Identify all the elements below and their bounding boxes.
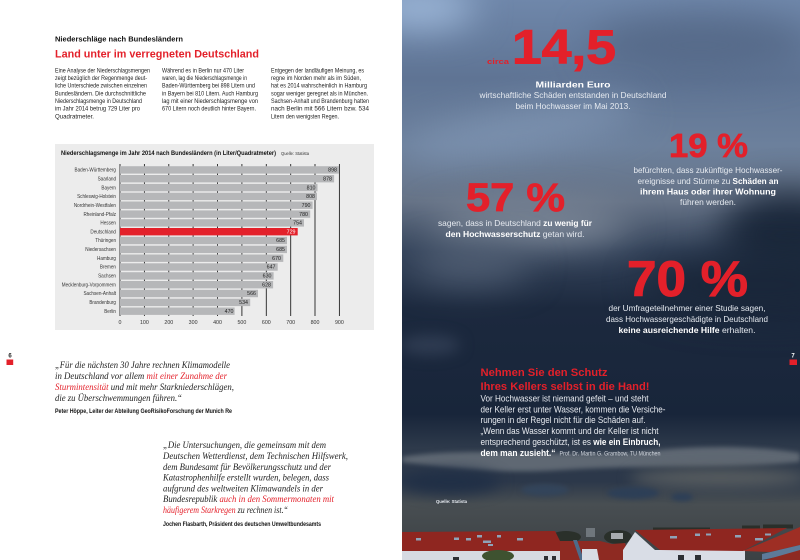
page number 7 xyxy=(790,354,797,365)
chart gridlines xyxy=(120,164,339,316)
callout body: dem man zusieht.“ xyxy=(480,448,556,458)
callout body: der Keller erst unter Wasser, kommen die Versiche- xyxy=(480,404,666,414)
text column 3: Litern den wenigsten Regen. xyxy=(271,113,339,120)
text column 3: regne im Norden mehr als im Süden, xyxy=(271,75,361,82)
stat: 70 percent xyxy=(606,251,768,335)
callout attribution: Prof. Dr. Martin G. Grambow, TU München xyxy=(560,452,660,458)
chart value labels: 898 xyxy=(328,168,337,174)
quote: Peter Höppe: die zu Überschwemmungen führen.“ xyxy=(55,392,182,404)
middle roofs xyxy=(560,541,630,560)
callout body: „Wenn das Wasser kommt und der Keller ist nicht xyxy=(480,426,659,436)
stat text: sagen, dass in Deutschland zu wenig für xyxy=(438,219,593,228)
stat text xyxy=(438,219,593,239)
callout body xyxy=(480,394,666,458)
stat text: der Umfrageteilnehmer einer Studie sagen, xyxy=(608,304,766,313)
chart bars xyxy=(120,166,339,315)
callout body: rungen in der Regel nicht für die Schäden auf. xyxy=(480,415,646,425)
text column 3: nach Berlin mit 566 Litern bzw. 534 xyxy=(271,106,369,113)
chart value labels: 670 xyxy=(272,256,281,262)
chart category labels: Sachsen xyxy=(98,273,116,280)
text column 2 xyxy=(161,67,258,113)
text column 1: im Jahr 2014 betrug 729 Liter pro xyxy=(55,106,140,113)
chart axis labels: 300 xyxy=(189,320,198,326)
houses along the bottom of the photo xyxy=(402,524,800,560)
photo source: Quelle: Statista xyxy=(436,499,467,505)
quote: Jochen Flasbarth: „Die Untersuchungen, die gemeinsam mit dem xyxy=(163,440,326,451)
text column 1: zeigt bezüglich der Regenmenge deut- xyxy=(55,75,147,82)
stat text: ereignisse und Stürme zu Schäden an xyxy=(638,177,778,186)
stat: 70 percent: 70 % xyxy=(627,251,748,307)
left house wall xyxy=(402,551,560,560)
text column 3 xyxy=(271,67,369,120)
callout: protect your cellar xyxy=(480,367,666,458)
text column 1: Eine Analyse der Niederschlagsmengen xyxy=(55,67,150,74)
small white house xyxy=(582,549,599,560)
stat: 57 percent xyxy=(438,176,593,239)
stat text xyxy=(634,166,783,207)
page number 6: 6 xyxy=(8,354,12,360)
main title: Land unter im verregneten Deutschland xyxy=(55,48,259,60)
chart value labels: 630 xyxy=(263,274,272,280)
quote: Jochen Flasbarth: aufgrund des weltweiten Klimawandels in der xyxy=(163,484,323,494)
chart value labels xyxy=(225,168,337,315)
text column 1: liche Unterschiede zwischen einzelnen xyxy=(55,83,147,90)
stat text: Milliarden Euro xyxy=(536,80,610,90)
chart axis labels: 0 xyxy=(119,320,122,326)
stat text: den Hochwasserschutz getan wird. xyxy=(446,230,584,239)
chart value labels: 685 xyxy=(276,238,285,244)
text column 1: Niederschlagsmenge in Deutschland xyxy=(55,98,142,105)
chart panel: rainfall by federal state xyxy=(55,144,374,330)
quote: Jochen Flasbarth xyxy=(162,440,348,528)
chart axis labels: 100 xyxy=(140,320,149,326)
stat text: dass Hochwassergeschädigte in Deutschland xyxy=(606,315,768,324)
chart axis labels: 800 xyxy=(311,320,319,326)
page number 7: 7 xyxy=(791,354,795,360)
chart value labels: 808 xyxy=(306,194,315,200)
chart value labels: 566 xyxy=(247,291,256,297)
stat: 14,5 billion euros xyxy=(478,22,667,111)
text column 3: hat es 2014 wahrscheinlich in Hamburg xyxy=(271,83,367,90)
chart axis labels: 400 xyxy=(213,320,222,326)
text column 2: 670 Litern noch deutlich hinter Bayern. xyxy=(162,106,256,113)
text column 2: in Bayern bei 810 Litern. Auch Hamburg xyxy=(162,90,258,97)
text column 1: Bundesländern. Die durchschnittliche xyxy=(55,90,146,97)
right house wall xyxy=(623,532,745,560)
text column 2: lag mit einer Niederschlagsmenge von xyxy=(162,98,258,105)
chart category labels: Mecklenburg-Vorpommern xyxy=(62,282,116,289)
quote: Peter Höppe: „Für die nächsten 30 Jahre rechnen Klimamodelle xyxy=(55,360,231,371)
chart category labels: Baden-Württemberg xyxy=(75,167,116,174)
chart value labels: 810 xyxy=(307,185,316,191)
left page background xyxy=(0,0,402,560)
stat number 14,5: 14,5 xyxy=(512,22,616,74)
storm sky photo xyxy=(365,0,800,560)
house windows xyxy=(453,555,701,560)
quote: Jochen Flasbarth: häufigerem Starkregen zu rechnen ist.“ xyxy=(163,505,288,516)
chart axis labels xyxy=(119,320,344,326)
section kicker: Niederschläge nach Bundesländern xyxy=(55,34,183,44)
callout body: entsprechend geschützt, ist es wie ein Einbruch, xyxy=(480,437,660,447)
chart value labels: 685 xyxy=(276,247,285,253)
quote author: Peter Höppe: Peter Höppe, Leiter der Abteilung GeoRisikoForschung der Munich Re xyxy=(55,409,233,415)
stat text: befürchten, dass zukünftige Hochwasser- xyxy=(634,166,783,175)
chart title: Niederschlagsmenge im Jahr 2014 nach Bundesländern (in Liter/Quadratmeter) xyxy=(61,150,276,157)
chart axis labels: 500 xyxy=(237,320,246,326)
steel chimney strip xyxy=(573,540,582,560)
stat: 19 percent xyxy=(634,127,783,207)
text column 2: Während es in Berlin nur 470 Liter xyxy=(162,67,245,74)
stat text xyxy=(606,304,768,335)
chart category labels: Hessen xyxy=(100,220,116,227)
skylights xyxy=(416,534,771,546)
circa label: circa xyxy=(487,57,510,66)
quote: Peter Höppe: Sturmintensität und mit mehr Starkniederschlägen, xyxy=(55,382,234,393)
quote: Jochen Flasbarth: Deutschen Wetterdienst, dem Technischen Hilfswerk, xyxy=(162,451,348,462)
chart value labels: 878 xyxy=(323,176,332,182)
tree in front of house xyxy=(482,550,514,560)
page number 6 xyxy=(6,354,13,365)
chart value labels: 647 xyxy=(267,265,276,271)
callout heading: Nehmen Sie den Schutz xyxy=(480,367,608,379)
far right roof xyxy=(743,527,800,552)
chart category labels: Deutschland xyxy=(90,229,116,236)
chart category labels xyxy=(62,167,117,315)
quote author: Jochen Flasbarth: Jochen Flasbarth, Präsident des deutschen Umweltbundesamts xyxy=(163,522,322,528)
chart category labels: Rheinland-Pfalz xyxy=(83,211,116,218)
stat text: keine ausreichende Hilfe erhalten. xyxy=(618,326,756,335)
chart value labels: 790 xyxy=(302,203,311,209)
text column 2: Baden-Württemberg bei 898 Litern und xyxy=(162,83,255,90)
callout body: Vor Hochwasser ist niemand gefeit – und steht xyxy=(480,394,649,404)
quote: Jochen Flasbarth: Bundesrepublik auch in den Sommermonaten mit xyxy=(163,494,334,505)
text column 3: Sachsen-Anhalt und Brandenburg hatten xyxy=(271,98,369,105)
chart value labels: 780 xyxy=(299,212,308,218)
tree line and background buildings xyxy=(551,524,793,544)
text column 3: sogar weniger geregnet als in München. xyxy=(271,90,368,97)
chart category labels: Thüringen xyxy=(95,238,116,244)
chart value labels: 470 xyxy=(225,309,234,315)
chart axis labels: 700 xyxy=(286,320,295,326)
text column 2: waren, lag die Niederschlagsmenge in xyxy=(161,75,247,82)
stat: 14,5 billion euros: beim Hochwasser im Mai 2013. xyxy=(516,102,630,111)
right house roof xyxy=(635,528,787,551)
chart category labels: Hamburg xyxy=(97,256,116,262)
chart category labels: Bremen xyxy=(100,264,116,271)
text column 3: Entgegen der landläufigen Meinung, es xyxy=(271,67,364,74)
stat: 14,5 billion euros: wirtschaftliche Schäden entstanden in Deutschland xyxy=(478,91,667,100)
chart axis labels: 900 xyxy=(335,320,344,326)
chart axis labels: 600 xyxy=(262,320,271,326)
chart category labels: Berlin xyxy=(104,309,116,315)
chart value labels: 754 xyxy=(293,221,302,227)
quote: Jochen Flasbarth: dem Bundesamt für Bevölkerungsschutz und der xyxy=(163,462,331,473)
chart axis labels: 200 xyxy=(164,320,173,326)
chart value labels: 534 xyxy=(239,300,248,306)
chart category labels: Brandenburg xyxy=(89,300,116,306)
left house roof xyxy=(402,531,565,551)
chart value labels: 729 xyxy=(287,229,296,235)
chart source: Quelle: Statista xyxy=(281,151,310,156)
stat: 19 percent: 19 % xyxy=(669,127,748,164)
text column 1: Quadratmeter. xyxy=(55,113,94,120)
chart category labels: Nordrhein-Westfalen xyxy=(74,203,116,209)
chart category labels: Saarland xyxy=(98,176,116,183)
chart category labels: Sachsen-Anhalt xyxy=(83,291,117,297)
chart category labels: Bayern xyxy=(101,185,116,191)
chart value labels: 628 xyxy=(262,282,271,288)
stat text: führen werden. xyxy=(680,198,736,207)
callout: protect your cellar: Ihres Kellers selbst in die Hand! xyxy=(480,381,650,393)
quote: Jochen Flasbarth: Katastrophenhilfe erstellt wurden, belegen, dass xyxy=(162,472,329,484)
intro text columns xyxy=(55,67,369,120)
quote: Peter Höppe: in Deutschland vor allem mit einer Zunahme der xyxy=(55,371,227,382)
stat: 57 percent: 57 % xyxy=(466,176,565,220)
quote: Peter Höppe xyxy=(55,360,234,415)
chart category labels: Niedersachsen xyxy=(85,247,116,253)
chart category labels: Schleswig-Holstein xyxy=(77,194,116,200)
stat text: ihrem Haus oder ihrer Wohnung xyxy=(640,188,776,196)
text column 1 xyxy=(55,67,150,120)
